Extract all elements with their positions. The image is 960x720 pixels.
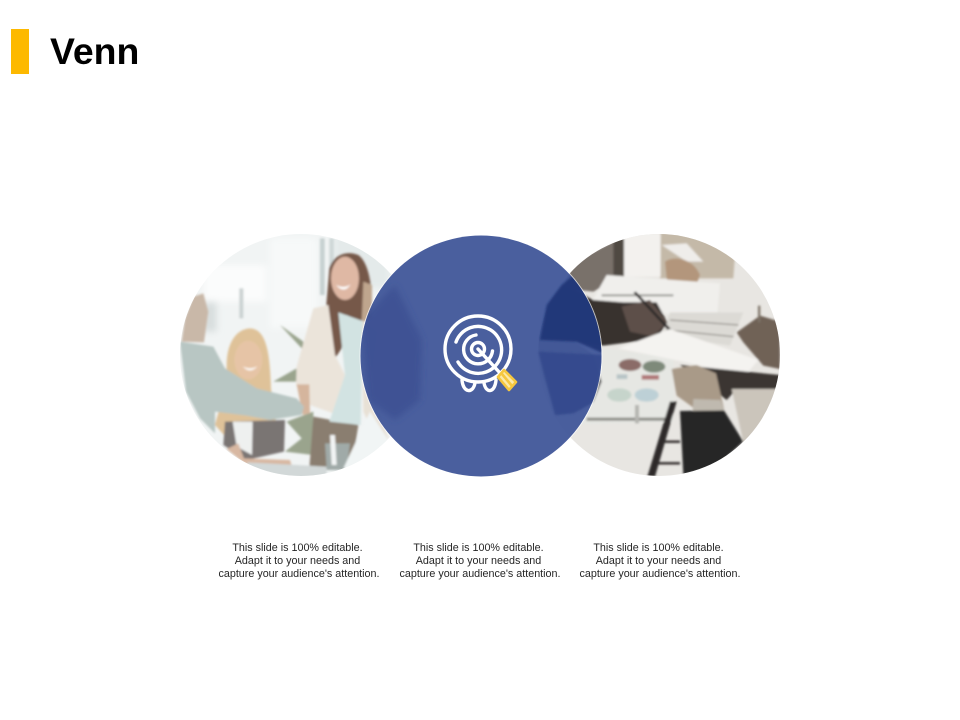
upper notebook bbox=[593, 275, 720, 314]
top background bbox=[660, 232, 737, 278]
caption: right: Adapt it to your needs and bbox=[596, 555, 721, 567]
icon: target with arrow bbox=[445, 316, 516, 391]
right hand bbox=[737, 316, 780, 369]
pen bbox=[633, 292, 674, 334]
centre circle bbox=[360, 234, 603, 478]
standing woman hair bbox=[326, 253, 372, 358]
standing woman blouse bbox=[329, 312, 363, 425]
seated woman jacket bbox=[223, 420, 285, 460]
ruled paper bbox=[662, 312, 743, 346]
monitor bbox=[343, 412, 387, 470]
caption: centre: capture your audience's attention. bbox=[399, 568, 561, 580]
photo: business handshake bbox=[180, 234, 391, 476]
binder black strip bbox=[647, 402, 677, 477]
lower right desk bbox=[732, 389, 780, 442]
man's head bbox=[182, 293, 208, 342]
desk bbox=[247, 462, 327, 478]
dark band bbox=[680, 365, 780, 400]
dark forearm bbox=[585, 294, 668, 347]
clasped hands bbox=[297, 384, 310, 415]
title: Venn bbox=[50, 30, 139, 72]
plant bbox=[273, 325, 313, 455]
caption: right: capture your audience's attention. bbox=[579, 568, 741, 580]
seated woman face bbox=[234, 341, 262, 379]
man's arm bbox=[180, 342, 304, 433]
caption: right: This slide is 100% editable. bbox=[593, 542, 724, 554]
accent bar bbox=[11, 29, 29, 74]
caption: centre: Adapt it to your needs and bbox=[416, 555, 541, 567]
caption: left: This slide is 100% editable. bbox=[232, 542, 363, 554]
pen cup bbox=[325, 443, 350, 470]
seated woman hair bbox=[215, 328, 278, 442]
caption: left: Adapt it to your needs and bbox=[235, 555, 360, 567]
standing woman jacket bbox=[296, 305, 345, 413]
seated woman hands bbox=[227, 443, 292, 466]
arrow fletching bbox=[498, 370, 516, 390]
photo: hands over documents bbox=[570, 234, 780, 476]
dark sleeve bbox=[680, 410, 743, 475]
chart sheet bbox=[537, 338, 673, 425]
dark hand under blue bbox=[592, 375, 603, 404]
lower hand bbox=[672, 365, 724, 409]
white sheet bbox=[618, 329, 758, 378]
standing woman face bbox=[331, 257, 359, 300]
watch bbox=[693, 399, 725, 412]
caption: centre: This slide is 100% editable. bbox=[413, 542, 544, 554]
standing woman pants bbox=[309, 417, 358, 468]
caption: left: capture your audience's attention. bbox=[218, 568, 380, 580]
top hand bbox=[664, 258, 700, 283]
overlap shading: hands seen through the circle bbox=[361, 275, 603, 420]
